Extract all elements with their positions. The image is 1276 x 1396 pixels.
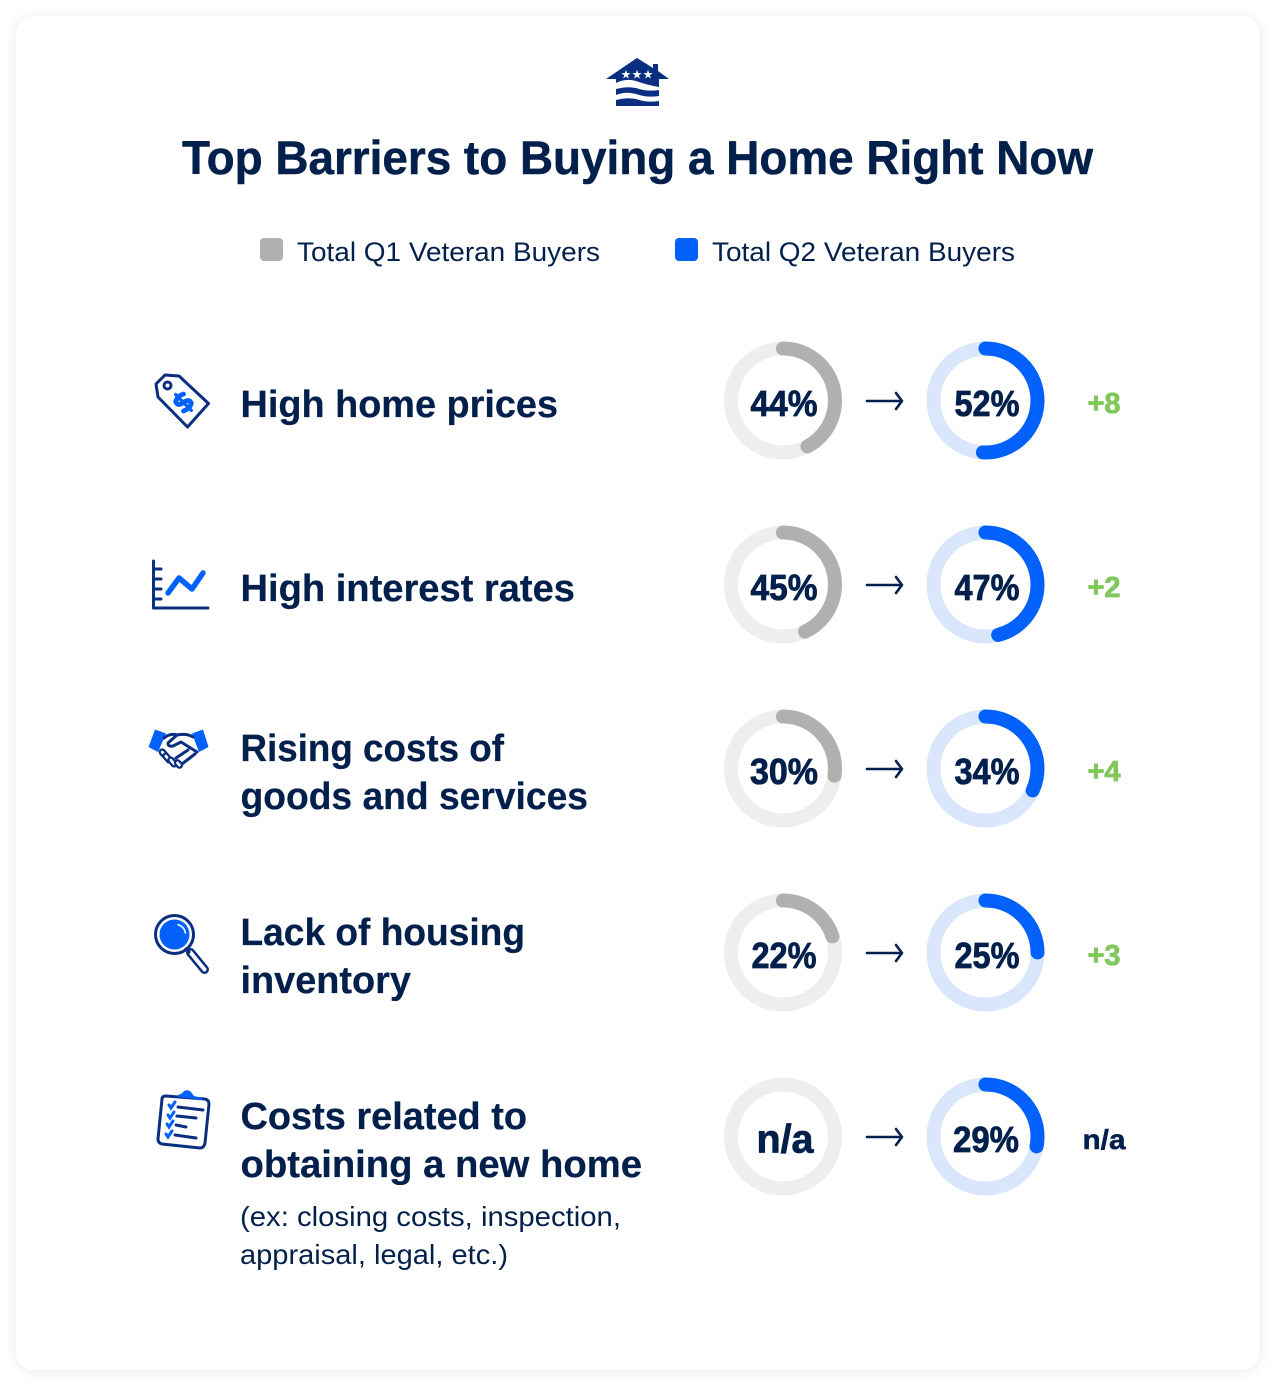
donut: Q2 25%: 25% xyxy=(954,935,1020,976)
icon: magnifying glass xyxy=(156,916,204,970)
donut: Q1 44% xyxy=(731,348,835,452)
label xyxy=(240,1096,642,1186)
label: goods and services xyxy=(240,776,588,818)
icon: price tag xyxy=(156,375,208,427)
donut: Q1 30%: 30% xyxy=(750,751,818,792)
donut: Q1 n/a: n/a xyxy=(756,1118,814,1162)
label: High home prices xyxy=(240,384,558,426)
label: Rising costs of xyxy=(240,728,504,770)
title: Top Barriers to Buying a Home Right Now xyxy=(182,131,1093,184)
label: High interest rates xyxy=(240,568,575,610)
donut: Q2 47%: 47% xyxy=(954,567,1020,608)
icon: house logo xyxy=(606,58,669,106)
arrow xyxy=(867,1129,902,1145)
donut: Q1 44%: 44% xyxy=(750,383,818,424)
donut: Q1 22% xyxy=(731,900,835,1004)
donut: Q2 34% xyxy=(934,716,1038,820)
row: high home prices xyxy=(156,348,1121,452)
change: +2: +2 xyxy=(1087,572,1121,604)
change: n/a: n/a xyxy=(1082,1124,1126,1155)
change: +4: +4 xyxy=(1087,756,1121,788)
donut: Q1 45% xyxy=(731,532,835,636)
legend xyxy=(260,237,1015,267)
icon: line chart xyxy=(154,561,208,608)
label xyxy=(240,912,525,1002)
icon: house logo: ★ xyxy=(632,68,642,82)
label: Costs related to xyxy=(240,1096,527,1138)
donut: Q2 52%: 52% xyxy=(954,383,1020,424)
donut: Q2 34%: 34% xyxy=(954,751,1020,792)
arrow xyxy=(867,393,902,409)
arrow xyxy=(867,945,902,961)
row: high interest rates xyxy=(154,532,1121,636)
change: +3: +3 xyxy=(1087,940,1121,972)
label: Lack of housing xyxy=(240,912,525,954)
donut: Q1 30% xyxy=(731,716,835,820)
icon: handshake xyxy=(148,730,208,769)
donut: Q2 29%: 29% xyxy=(953,1119,1019,1160)
row: rising costs xyxy=(148,716,1121,820)
icon: clipboard xyxy=(158,1090,209,1148)
icon: house logo: ★ xyxy=(621,68,631,82)
icon: house logo: ★ xyxy=(643,68,653,82)
change: +8: +8 xyxy=(1087,388,1121,420)
donut: Q1 45%: 45% xyxy=(750,567,818,608)
note: (ex: closing costs, inspection, xyxy=(240,1201,621,1232)
donut: Q2 47% xyxy=(934,532,1038,636)
note: appraisal, legal, etc.) xyxy=(240,1239,508,1270)
label: inventory xyxy=(240,960,411,1002)
donut: Q1 22%: 22% xyxy=(752,935,816,976)
note xyxy=(240,1201,621,1270)
row: costs of obtaining a new home xyxy=(158,1084,1126,1270)
legend: Total Q2 Veteran Buyers xyxy=(712,237,1015,267)
row: lack of inventory xyxy=(156,900,1121,1004)
donut: Q2 52% xyxy=(934,348,1038,452)
donut: Q2 29% xyxy=(934,1084,1038,1188)
label: obtaining a new home xyxy=(240,1144,642,1186)
donut: Q2 25% xyxy=(934,900,1038,1004)
label xyxy=(240,728,588,818)
arrow xyxy=(867,761,902,777)
arrow xyxy=(867,577,902,593)
donut: Q1 n/a xyxy=(731,1084,835,1188)
legend: Total Q1 Veteran Buyers xyxy=(297,237,600,267)
